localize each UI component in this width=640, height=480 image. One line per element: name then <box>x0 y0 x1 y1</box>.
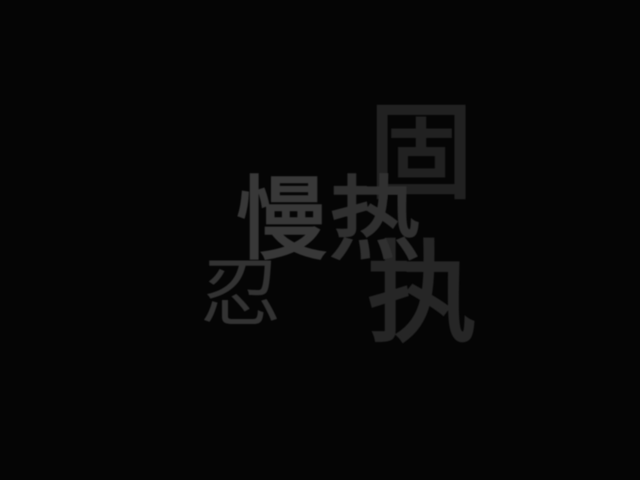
word: 执: 执 <box>367 233 477 356</box>
word: 热: 热 <box>329 170 420 271</box>
word: 忍: 忍 <box>200 252 281 335</box>
word: 慢: 慢 <box>236 170 327 271</box>
word: 固: 固 <box>369 96 473 212</box>
